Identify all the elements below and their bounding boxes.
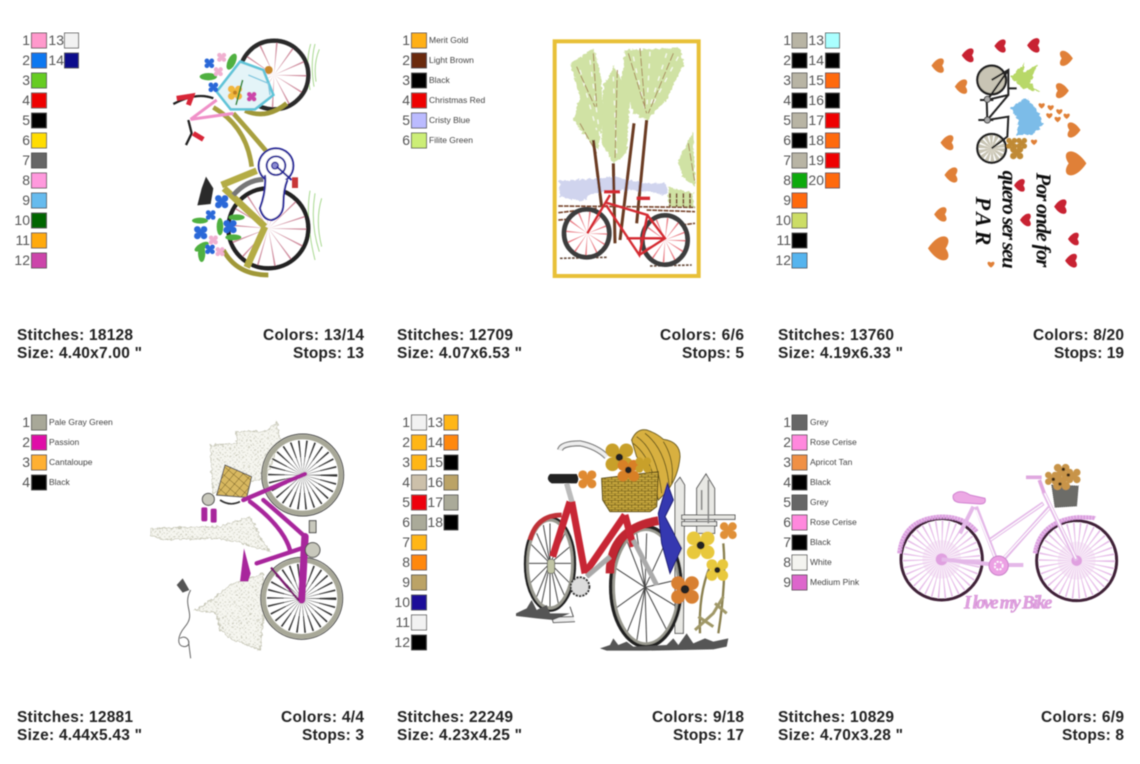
color legend 1: 11	[15, 232, 30, 248]
stats 1: Stitches: 18128	[17, 327, 133, 344]
color legend 6: Grey	[810, 497, 829, 507]
color legend 1	[14, 32, 78, 268]
stats 2: Stops: 5	[682, 345, 744, 362]
color legend 1: 9	[22, 192, 30, 208]
color legend 6: 6	[783, 514, 791, 530]
stats 4: Size: 4.44x5.43 "	[17, 727, 142, 744]
color legend 3: 8	[783, 172, 791, 188]
color legend 5: 12	[394, 634, 410, 650]
color legend 1: 4	[22, 92, 30, 108]
color legend 5: 13	[427, 414, 443, 430]
panel: design 6 pink bicycle	[778, 414, 1124, 744]
color legend 5: 15	[427, 454, 443, 470]
color legend 4: Passion	[49, 437, 80, 447]
color legend 5: 14	[427, 434, 443, 450]
stats 2: Colors: 6/6	[660, 327, 744, 344]
color legend 1: 2	[22, 52, 30, 68]
color legend 3: 3	[783, 72, 791, 88]
color legend 3: 20	[808, 172, 824, 188]
color legend 3: 5	[783, 112, 791, 128]
stats 5	[397, 709, 744, 744]
color legend 5: 6	[402, 514, 410, 530]
stats 5: Colors: 9/18	[652, 709, 744, 726]
color legend 2: Light Brown	[429, 55, 474, 65]
color legend 3: 15	[808, 72, 824, 88]
stats 5: Stops: 17	[673, 727, 744, 744]
color legend 3	[775, 32, 840, 268]
color legend 2	[402, 32, 485, 148]
color legend 6: Rose Cerise	[810, 517, 857, 527]
color legend 1: 7	[22, 152, 30, 168]
color legend 5: 10	[394, 594, 410, 610]
color legend 2: 6	[402, 132, 410, 148]
color legend 3: 12	[775, 252, 791, 268]
color legend 6: Apricot Tan	[810, 457, 853, 467]
color legend 5: 8	[402, 554, 410, 570]
color legend 2: 1	[402, 32, 410, 48]
color legend 5: 1	[402, 414, 410, 430]
stats 6	[778, 709, 1124, 744]
tandem bicycle, hearts and rotated message: quero ser seu	[998, 171, 1020, 269]
color legend 2: 5	[402, 112, 410, 128]
color legend 1: 1	[22, 32, 30, 48]
tandem bicycle, hearts and rotated message	[928, 38, 1086, 269]
panel: design 1 floral bicycle	[14, 32, 364, 362]
color legend 6	[783, 414, 860, 590]
color legend 2: Filite Green	[429, 135, 473, 145]
color legend 5: 4	[402, 474, 410, 490]
color legend 4: 4	[22, 474, 30, 490]
color legend 6: 9	[783, 574, 791, 590]
stats 3: Stitches: 13760	[778, 327, 894, 344]
embroidered bicycle with flowers	[173, 41, 322, 275]
pink bicycle with flower basket and script: I love my Bike	[963, 592, 1052, 613]
stats 3	[778, 327, 1124, 362]
color legend 1: 12	[14, 252, 30, 268]
color legend 3: 16	[808, 92, 824, 108]
color legend 3: 4	[783, 92, 791, 108]
color legend 2: 3	[402, 72, 410, 88]
color legend 5	[394, 414, 458, 650]
stats 4: Colors: 4/4	[281, 709, 364, 726]
color legend 6: 1	[783, 414, 791, 430]
panel: design 2 bicycle under trees	[397, 32, 744, 362]
color legend 1: 5	[22, 112, 30, 128]
color legend 6: 7	[783, 534, 791, 550]
color legend 2: Christmas Red	[429, 95, 485, 105]
panel: design 4 purple bicycle in Paris	[17, 414, 364, 744]
color legend 6: Black	[810, 477, 832, 487]
panel: design 3 tandem bicycle with hearts	[775, 32, 1124, 362]
color legend 4	[22, 414, 113, 490]
color legend 1: 13	[48, 32, 64, 48]
stats 2: Size: 4.07x6.53 "	[397, 345, 522, 362]
color legend 6: 8	[783, 554, 791, 570]
stats 4: Stitches: 12881	[17, 709, 133, 726]
color legend 5: 9	[402, 574, 410, 590]
color legend 4: Pale Gray Green	[49, 417, 113, 427]
color legend 1: 3	[22, 72, 30, 88]
color legend 2: Cristy Blue	[429, 115, 470, 125]
color legend 4: 2	[22, 434, 30, 450]
color legend 6: 4	[783, 474, 791, 490]
color legend 5: 17	[427, 494, 443, 510]
color legend 5: 2	[402, 434, 410, 450]
color legend 6: Medium Pink	[810, 577, 860, 587]
stats 3: Stops: 19	[1054, 345, 1124, 362]
stats 2: Stitches: 12709	[397, 327, 513, 344]
stats 1: Colors: 13/14	[263, 327, 364, 344]
stats 1: Stops: 13	[293, 345, 364, 362]
color legend 1: 6	[22, 132, 30, 148]
stats 4: Stops: 3	[302, 727, 364, 744]
stats 5: Size: 4.23x4.25 "	[397, 727, 522, 744]
stats 2	[397, 327, 744, 362]
color legend 6: 3	[783, 454, 791, 470]
color legend 1: 8	[22, 172, 30, 188]
color legend 6: 5	[783, 494, 791, 510]
stats 6: Colors: 6/9	[1041, 709, 1124, 726]
color legend 3: 14	[808, 52, 824, 68]
red bicycle, basket, hat, fence and flowers	[516, 430, 737, 651]
color legend 3: 18	[808, 132, 824, 148]
color legend 5: 3	[402, 454, 410, 470]
stats 3: Colors: 8/20	[1033, 327, 1124, 344]
color legend 3: 7	[783, 152, 791, 168]
color legend 5: 16	[427, 474, 443, 490]
color legend 3: 13	[808, 32, 824, 48]
color legend 6: Grey	[810, 417, 829, 427]
stats 3: Size: 4.19x6.33 "	[778, 345, 903, 362]
color legend 6: Rose Cerise	[810, 437, 857, 447]
stats 6: Size: 4.70x3.28 "	[778, 727, 903, 744]
stats 5: Stitches: 22249	[397, 709, 513, 726]
purple bicycle with Paris landmarks	[150, 422, 344, 658]
stats 6: Stops: 8	[1062, 727, 1124, 744]
color legend 3: 11	[776, 232, 791, 248]
color legend 3: 9	[783, 192, 791, 208]
color legend 5: 18	[427, 514, 443, 530]
color legend 3: 19	[808, 152, 824, 168]
pink bicycle with flower basket and script	[899, 464, 1117, 613]
stats 4	[17, 709, 364, 744]
color legend 4: Cantaloupe	[49, 457, 93, 467]
color legend 2: Merit Gold	[429, 35, 468, 45]
panel: design 5 red bicycle with basket and fence	[394, 414, 744, 744]
color legend 4: 3	[22, 454, 30, 470]
color legend 5: 11	[395, 614, 410, 630]
tandem bicycle, hearts and rotated message: PAR	[971, 196, 996, 245]
color legend 4: Black	[49, 477, 71, 487]
color legend 6: Black	[810, 537, 832, 547]
color legend 1: 10	[14, 212, 30, 228]
color legend 6: 2	[783, 434, 791, 450]
stats 1	[17, 327, 364, 362]
color legend 3: 2	[783, 52, 791, 68]
tandem bicycle, hearts and rotated message: Por onde for	[1032, 172, 1054, 268]
color legend 3: 1	[783, 32, 791, 48]
color legend 5: 5	[402, 494, 410, 510]
color legend 3: 6	[783, 132, 791, 148]
framed scene with trees and red bicycle	[555, 41, 699, 276]
color legend 2: 2	[402, 52, 410, 68]
color legend 2: 4	[402, 92, 410, 108]
color legend 2: Black	[429, 75, 451, 85]
color legend 5: 7	[402, 534, 410, 550]
stats 1: Size: 4.40x7.00 "	[17, 345, 142, 362]
color legend 3: 17	[808, 112, 824, 128]
color legend 3: 10	[775, 212, 791, 228]
color legend 1: 14	[48, 52, 64, 68]
color legend 6: White	[810, 557, 832, 567]
stats 6: Stitches: 10829	[778, 709, 894, 726]
color legend 4: 1	[22, 414, 30, 430]
